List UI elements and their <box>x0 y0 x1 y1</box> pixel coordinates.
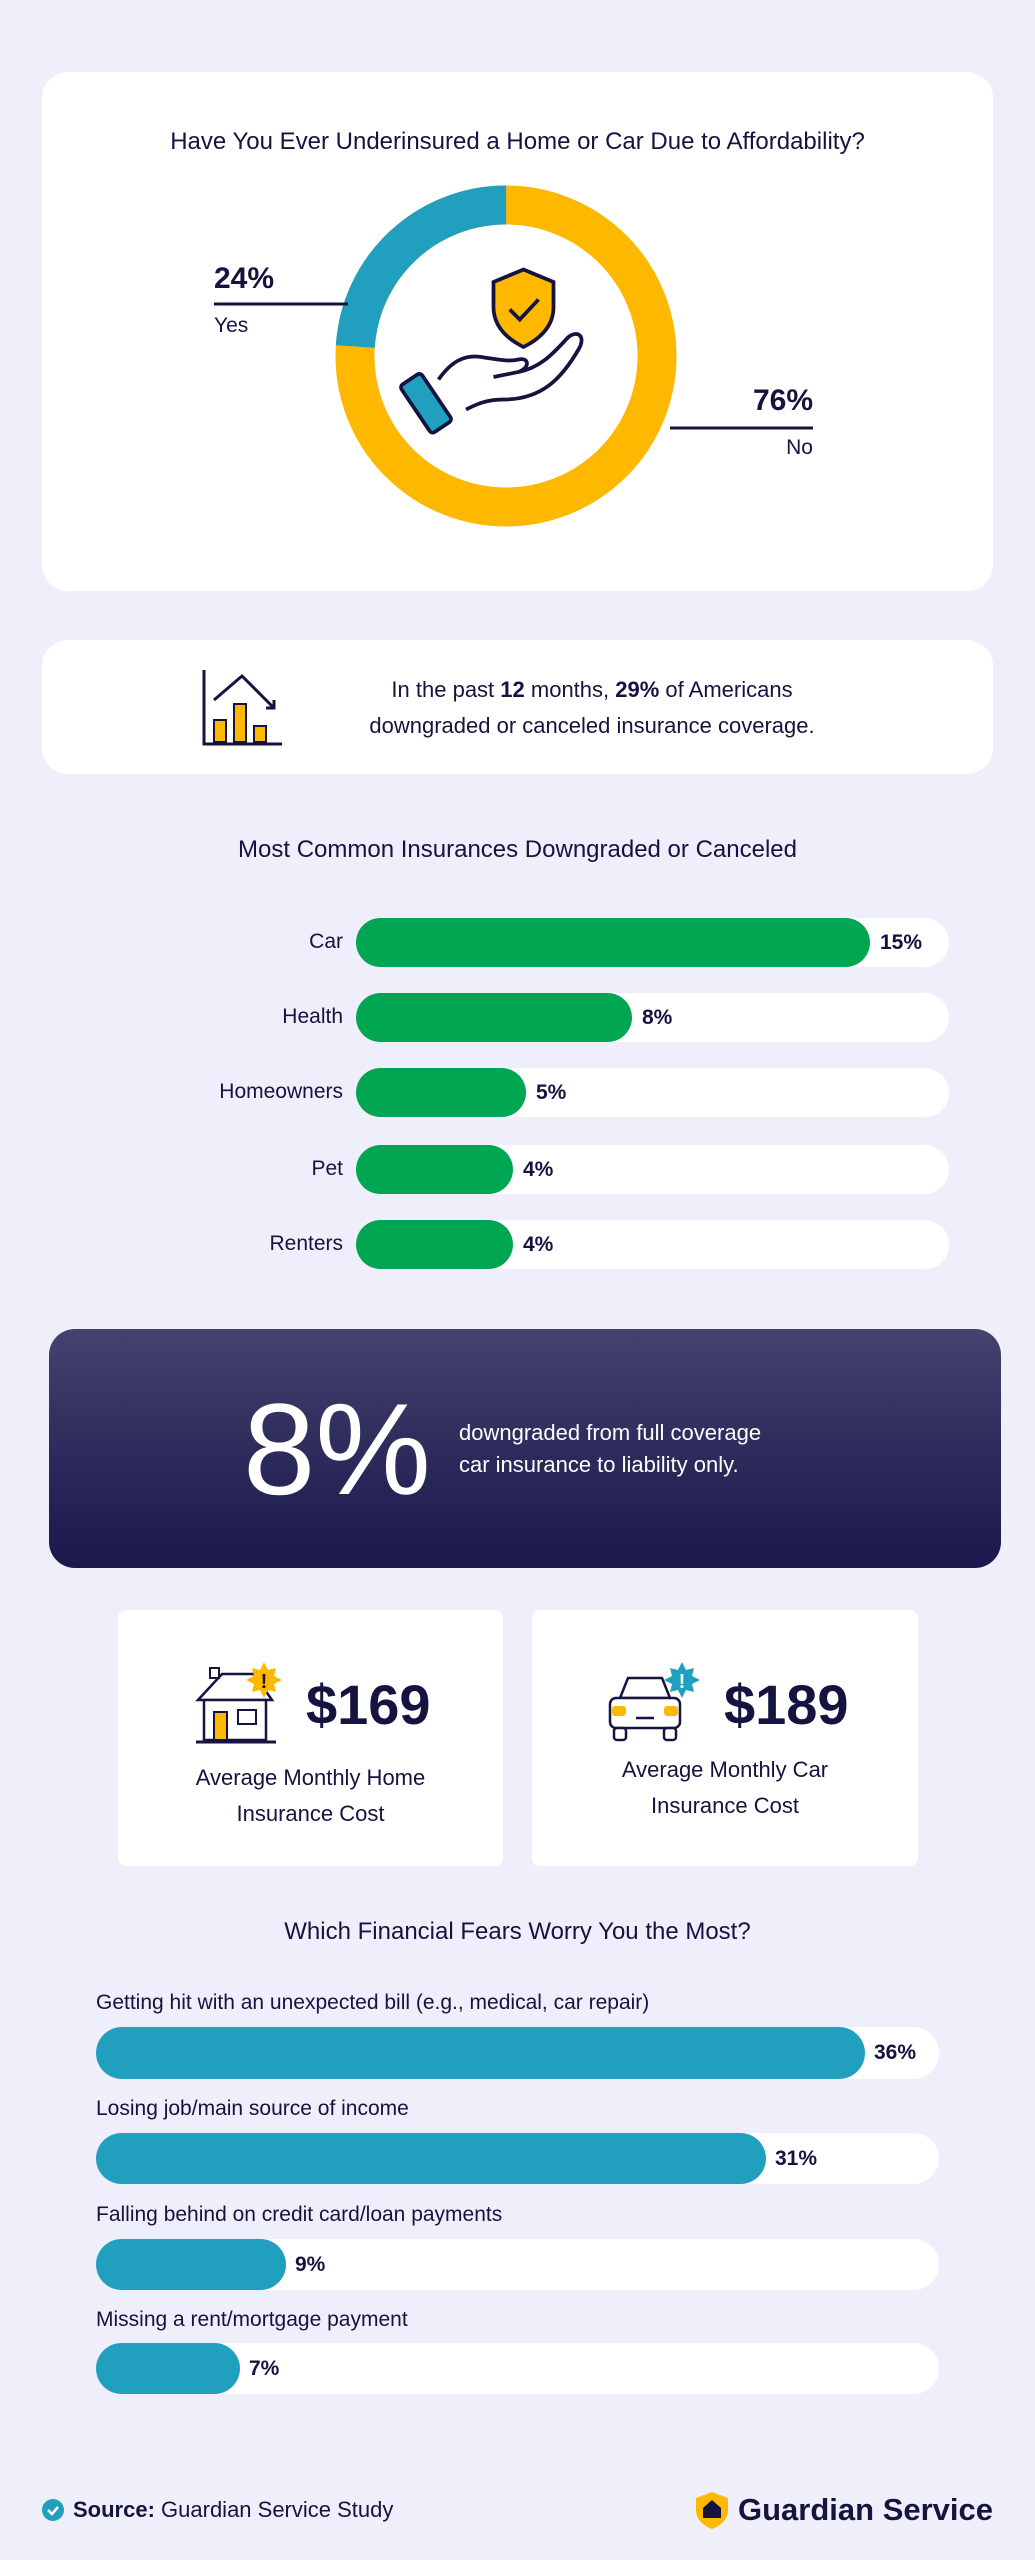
card: home cost <box>118 1610 503 1866</box>
label: yes 24%: 24% <box>214 262 274 295</box>
label: no 76%: 76% <box>753 384 813 417</box>
bar chart: financial fears: 9% <box>295 2252 325 2276</box>
value: $189 <box>724 1673 849 1736</box>
big number: 8% <box>243 1376 431 1522</box>
caption <box>622 1757 828 1818</box>
value: $169 <box>306 1673 431 1736</box>
logo: Guardian Service <box>738 2492 993 2527</box>
label: no 76%: No <box>786 436 813 459</box>
bar chart: financial fears: Getting hit with an unexpected bill (e.g., medical, car repair) <box>96 1991 649 2014</box>
bar chart: financial fears <box>96 1991 939 2394</box>
label: yes 24% <box>214 262 274 337</box>
caption <box>196 1765 425 1826</box>
donut chart <box>214 186 813 526</box>
bar chart: insurances: Pet <box>311 1157 343 1180</box>
text <box>459 1420 761 1477</box>
bar chart: financial fears: Losing job/main source of income <box>96 2097 409 2120</box>
label: no 76% <box>753 384 813 459</box>
bar chart: insurances: 4% <box>523 1158 553 1180</box>
bar chart: insurances: 8% <box>642 1006 672 1028</box>
bar chart: financial fears: 36% <box>874 2041 916 2064</box>
caption: Insurance Cost <box>651 1793 799 1818</box>
icon: hand with shield <box>400 270 582 434</box>
card: car cost <box>532 1610 918 1866</box>
bar chart: insurances: 15% <box>880 930 922 954</box>
heading: financial fears: Which Financial Fears Worry You the Most? <box>284 1918 751 1945</box>
caption: Insurance Cost <box>237 1801 384 1826</box>
bar chart: insurances: Homeowners <box>219 1080 343 1103</box>
heading: most common insurances: Most Common Insurances Downgraded or Canceled <box>238 836 797 863</box>
icon: house: ! <box>261 1671 267 1693</box>
icon: declining bar chart <box>202 670 282 746</box>
bar chart: financial fears: Falling behind on credit card/loan payments <box>96 2203 502 2226</box>
text: In the past 12 months, 29% of Americans downgraded or canceled insurance coverage. <box>369 677 815 738</box>
bar chart: insurances: 4% <box>523 1232 553 1256</box>
icon: house <box>195 1662 282 1744</box>
bar chart: financial fears: Missing a rent/mortgage payment <box>96 2308 408 2331</box>
bar chart: insurances: 5% <box>536 1080 566 1104</box>
banner: 8% liability <box>49 1329 1001 1568</box>
caption: Average Monthly Car <box>622 1757 828 1782</box>
text: car insurance to liability only. <box>459 1452 739 1477</box>
icon: car: ! <box>679 1671 685 1693</box>
bar chart: financial fears: 7% <box>249 2356 279 2380</box>
text: downgraded from full coverage <box>459 1420 761 1445</box>
title: Have You Ever Underinsured a Home or Car Due to Affordability? <box>170 128 865 155</box>
footer: source: Source: Guardian Service Study <box>73 2497 393 2522</box>
bar chart: insurances <box>219 918 949 1269</box>
icon: check <box>42 2499 64 2521</box>
panel: 29% stat <box>42 640 993 774</box>
bar chart: insurances: Health <box>282 1005 343 1028</box>
bar chart: insurances: Car <box>309 930 343 953</box>
caption: Average Monthly Home <box>196 1765 425 1790</box>
icon: car <box>608 1662 700 1742</box>
bar chart: insurances: Renters <box>269 1232 343 1255</box>
label: yes 24%: Yes <box>214 314 248 337</box>
panel: underinsured donut <box>42 72 993 591</box>
bar chart: financial fears: 31% <box>775 2146 817 2170</box>
